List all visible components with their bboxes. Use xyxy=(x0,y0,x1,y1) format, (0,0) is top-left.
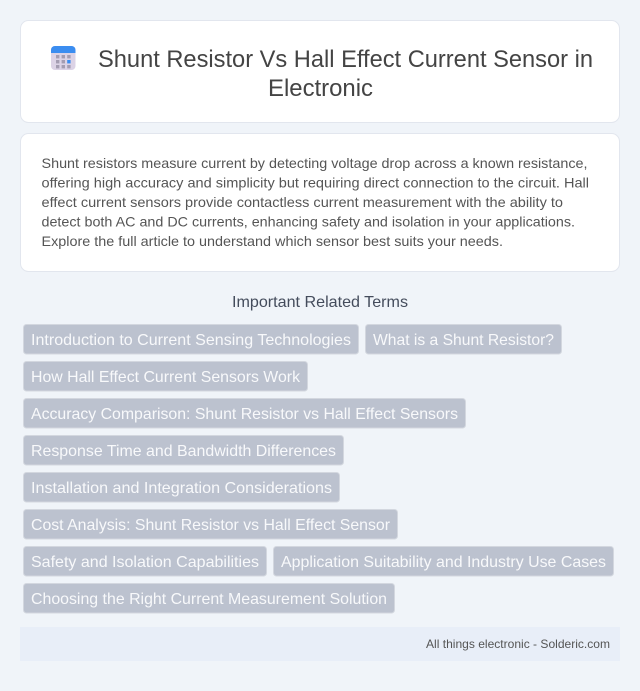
tag: accuracy comparison xyxy=(24,398,466,428)
text block: description: effect current sensors provide contactless current measurement with the ability to xyxy=(42,194,563,210)
tag: how hall effect sensors work: How Hall Effect Current Sensors Work xyxy=(31,369,301,386)
text block: description: detect both AC and DC currents, enhancing safety and isolation in your applications. xyxy=(42,214,575,230)
tag: what is a shunt resistor xyxy=(366,324,562,354)
tag: safety and isolation: Safety and Isolation Capabilities xyxy=(31,554,259,571)
text block: description: offering high accuracy and simplicity but requiring direct connection to the circuit. Hall xyxy=(42,174,589,190)
footer credit: All things electronic - Solderic.com xyxy=(426,637,610,651)
tag: accuracy comparison: Accuracy Comparison: Shunt Resistor vs Hall Effect Sensors xyxy=(31,406,458,423)
title: Electronic xyxy=(268,75,373,102)
panel: related terms tags xyxy=(24,324,614,613)
tag: safety and isolation xyxy=(24,546,266,576)
icon: calendar xyxy=(51,46,76,70)
text block: description xyxy=(42,155,589,249)
text block: description: Explore the full article to understand which sensor best suits your needs. xyxy=(42,233,503,249)
tag: installation: Installation and Integration Considerations xyxy=(31,480,332,497)
text block: description: Shunt resistors measure current by detecting voltage drop across a known resistance, xyxy=(42,155,588,171)
tag: application suitability: Application Suitability and Industry Use Cases xyxy=(281,554,606,571)
tag: how hall effect sensors work xyxy=(24,362,308,391)
tag: response time xyxy=(24,436,344,465)
heading: important related terms: Important Related Terms xyxy=(232,294,408,311)
tag: cost analysis: Cost Analysis: Shunt Resistor vs Hall Effect Sensor xyxy=(31,517,391,534)
tag: what is a shunt resistor: What is a Shunt Resistor? xyxy=(373,332,554,349)
panel: title card xyxy=(20,20,620,122)
footer bar xyxy=(20,627,620,661)
tag: introduction: Introduction to Current Sensing Technologies xyxy=(31,332,351,349)
tag: installation xyxy=(24,472,340,502)
tag: introduction xyxy=(24,324,358,354)
tag: application suitability xyxy=(274,546,614,576)
tag: choosing the right solution xyxy=(24,584,394,613)
title xyxy=(98,46,593,102)
panel: description text card xyxy=(20,134,620,272)
tag: cost analysis xyxy=(24,510,398,539)
tag: choosing the right solution: Choosing the Right Current Measurement Solution xyxy=(31,591,387,608)
tag: response time: Response Time and Bandwidth Differences xyxy=(31,443,336,460)
title: Shunt Resistor Vs Hall Effect Current Sensor in xyxy=(98,46,593,73)
